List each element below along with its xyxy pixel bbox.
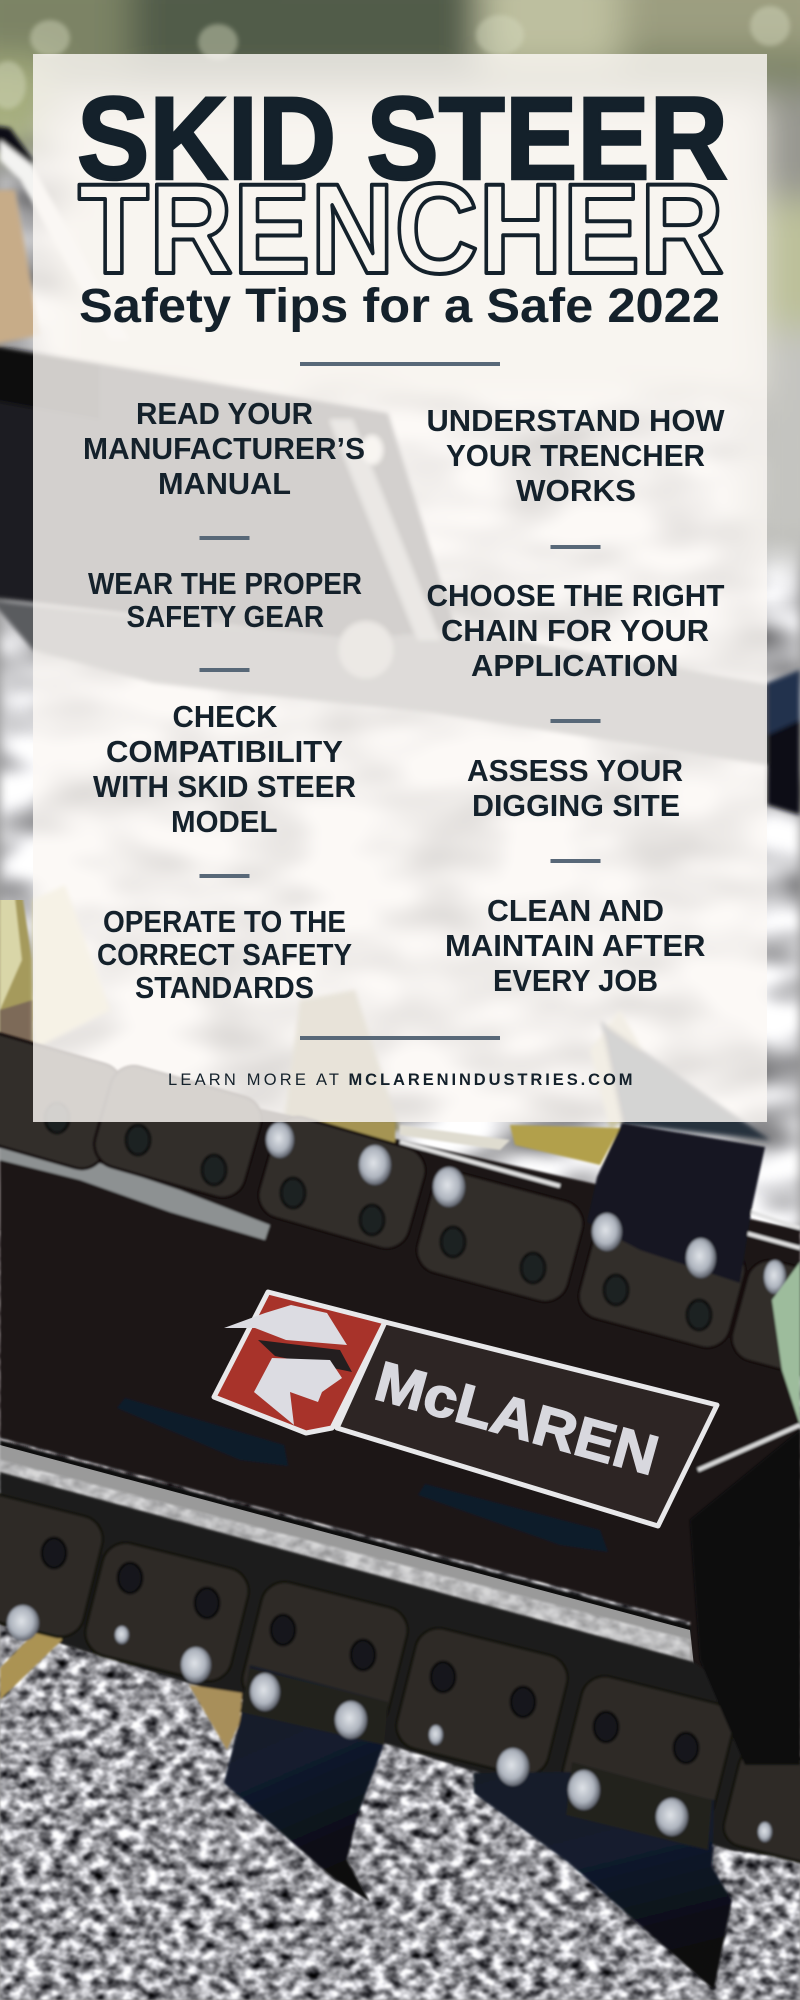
tip: safety standards: OPERATE TO THE: [103, 905, 346, 939]
right dark machine block: [690, 1430, 800, 1765]
bolts: [266, 1122, 786, 1294]
title line: skid steer: SKID STEER: [77, 73, 728, 205]
tip: safety standards: [97, 905, 352, 1005]
tip: assess site: DIGGING SITE: [472, 788, 680, 823]
gravel ground: [0, 1230, 800, 2000]
divider: [550, 545, 600, 549]
tip: read your manual: [83, 397, 365, 501]
tip: read your manual: MANUFACTURER’S: [83, 432, 365, 466]
gold brackets above chain: [510, 1125, 620, 1165]
footer call to action: LEARN MORE AT: [168, 1071, 339, 1089]
cutter tooth two: [474, 1772, 732, 1990]
tip: compatibility: WITH SKID STEER: [93, 770, 356, 804]
tooth mounts: [240, 1668, 388, 1745]
logo wordmark: McLAREN: [369, 1349, 665, 1487]
lower gravel strip behind chain: [0, 1445, 695, 1675]
lower bolts: [7, 1605, 772, 1842]
tip: assess site: [467, 753, 683, 823]
blurred gravel backdrop: [0, 0, 800, 1240]
tip: compatibility: MODEL: [171, 805, 278, 839]
title: [77, 73, 728, 333]
right column of tips: [426, 403, 725, 998]
gold pieces: [189, 1685, 242, 1750]
gold teeth behind the panel: [33, 885, 770, 1150]
title line: trencher outline: TRENCHER: [78, 158, 724, 301]
tip: compatibility: CHECK: [172, 700, 278, 734]
translucent panel: [33, 54, 767, 1122]
chain silver edge lines: [400, 1142, 800, 1248]
tip: read your manual: MANUAL: [158, 467, 291, 501]
thin wire highlight: [698, 1425, 800, 1470]
tip: safety standards: CORRECT SAFETY: [97, 938, 352, 972]
tip: choose chain: CHOOSE THE RIGHT: [426, 578, 725, 613]
logo plate: [337, 1322, 717, 1526]
divider: [200, 874, 250, 878]
tip: understand trencher: YOUR TRENCHER: [446, 438, 705, 473]
bar slot marks: [117, 1398, 288, 1466]
tip: compatibility: COMPATIBILITY: [106, 735, 343, 769]
divider: [200, 668, 250, 672]
tip: choose chain: [426, 578, 725, 683]
lower chain with cutting teeth: [0, 1430, 800, 1990]
divider: [200, 536, 250, 540]
tip: understand trencher: [426, 403, 725, 508]
footer call to action: [168, 1071, 632, 1089]
tip: read your manual: READ YOUR: [136, 397, 313, 431]
studs: [45, 1103, 711, 1330]
tip: compatibility: [93, 700, 356, 839]
tip: understand trencher: WORKS: [516, 473, 636, 508]
tip: clean and maintain: CLEAN AND: [487, 893, 664, 928]
rear chain links: [0, 1472, 800, 1860]
tip: safety gear: [88, 567, 362, 634]
silver rod: [0, 1138, 270, 1240]
tip: clean and maintain: [445, 893, 706, 998]
blurred foliage at top: [0, 0, 800, 560]
lower studs: [42, 1538, 698, 1763]
background photo: trencher chain on gravel: [0, 0, 800, 1240]
tip: safety standards: STANDARDS: [135, 971, 314, 1005]
subtitle: Safety Tips for a Safe 2022: [79, 280, 720, 333]
McLaren logo decal: [214, 1292, 717, 1526]
tip: assess site: ASSESS YOUR: [467, 753, 683, 788]
icon: worker head: [224, 1305, 352, 1425]
tip: understand trencher: UNDERSTAND HOW: [426, 403, 725, 438]
tip: safety gear: WEAR THE PROPER: [88, 567, 362, 601]
logo badge red: [214, 1292, 385, 1433]
left column of tips: [83, 397, 365, 1005]
trencher bar and upper chain: [0, 1028, 800, 1800]
left gold tooth edge: [0, 850, 33, 1060]
cutter tooth one: [224, 1665, 388, 1902]
chain links: [0, 1028, 800, 1395]
black bar: [0, 1050, 800, 1800]
divider: [550, 719, 600, 723]
front links: [0, 1488, 800, 1870]
tip: choose chain: APPLICATION: [471, 648, 678, 683]
footer call to action: MCLARENINDUSTRIES.COM: [348, 1071, 632, 1089]
tip: safety gear: SAFETY GEAR: [126, 600, 324, 634]
tip: choose chain: CHAIN FOR YOUR: [441, 613, 709, 648]
green guard piece at right: [772, 1262, 800, 1425]
dark blade on top chain: [587, 1123, 765, 1283]
bokeh highlights: [0, 6, 790, 109]
tip: clean and maintain: MAINTAIN AFTER: [445, 928, 706, 963]
blurred machine arm and bracket: [0, 125, 800, 815]
top divider: [300, 362, 500, 366]
divider: [550, 859, 600, 863]
bottom divider: [300, 1036, 500, 1040]
tip: clean and maintain: EVERY JOB: [493, 963, 658, 998]
